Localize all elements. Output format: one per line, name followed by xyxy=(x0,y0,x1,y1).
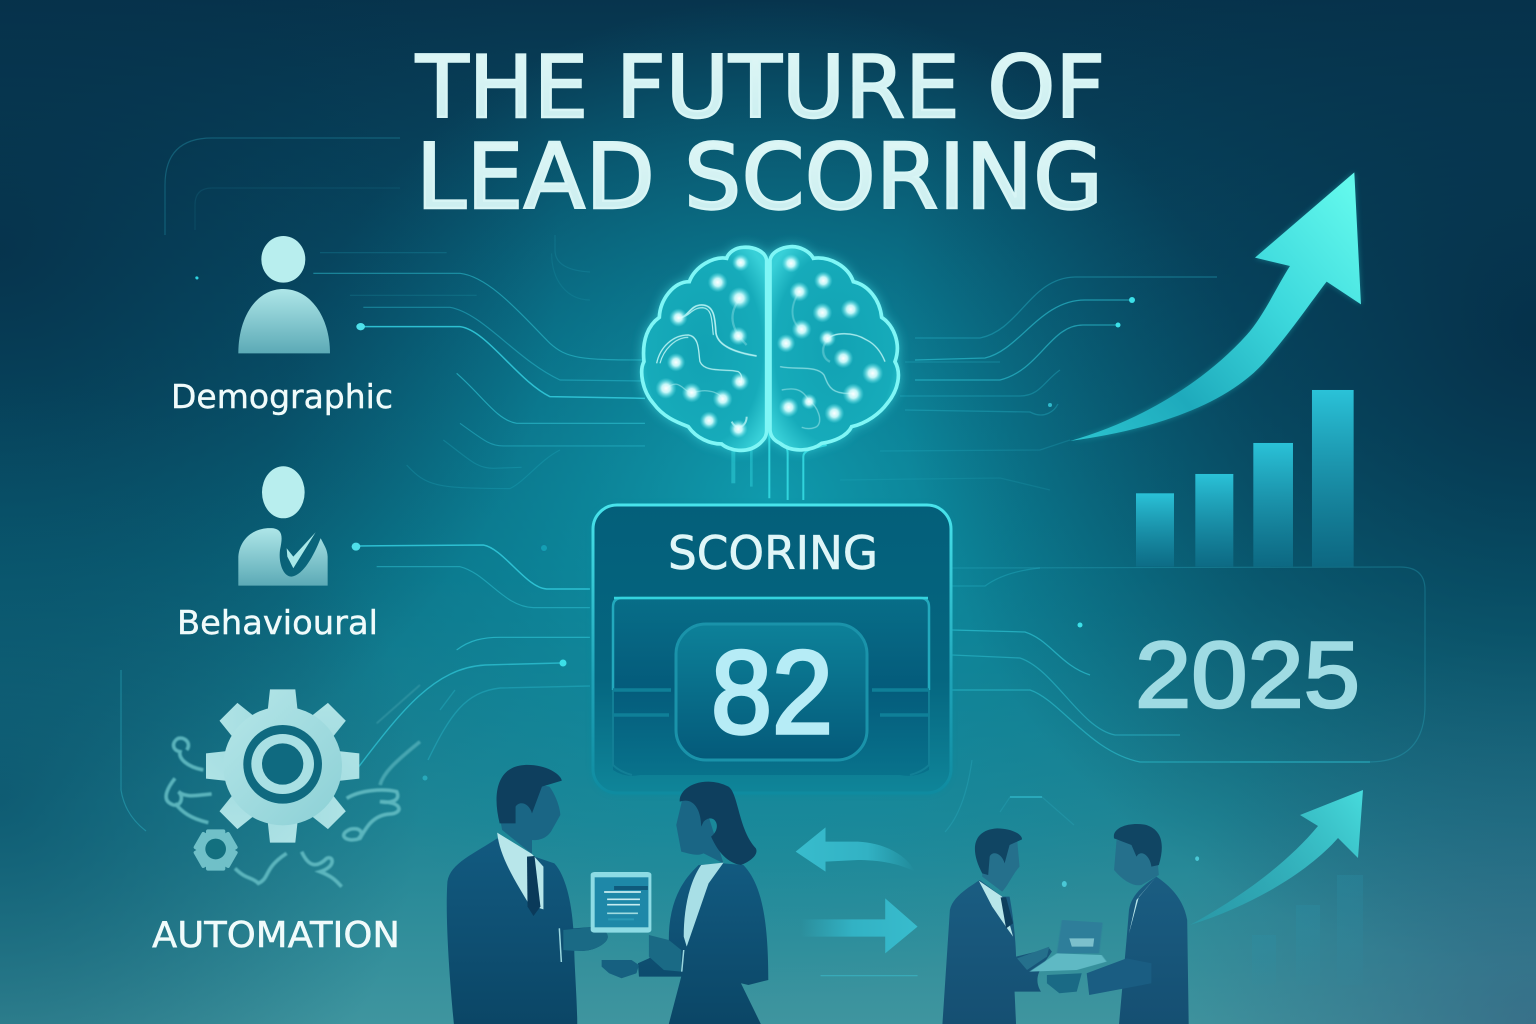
decorative frame lines xyxy=(121,138,1425,832)
lower chart with arrow xyxy=(1190,790,1363,985)
label: AUTOMATION: AUTOMATION xyxy=(152,915,400,956)
tablet xyxy=(591,872,651,933)
label: Demographic: Demographic xyxy=(171,377,393,416)
smoke squiggles xyxy=(166,685,420,887)
small gear xyxy=(193,829,238,871)
right hemisphere xyxy=(770,247,898,450)
title: THE FUTURE OF xyxy=(415,38,1105,138)
score display xyxy=(676,624,867,760)
connection lines: right side xyxy=(541,277,1370,762)
icon: brain xyxy=(642,247,898,500)
right man xyxy=(1087,824,1189,1024)
connection lines: left side xyxy=(195,253,645,650)
people: first pair with tablet xyxy=(447,765,768,1024)
inner frame xyxy=(613,598,929,776)
people: second pair with laptop xyxy=(942,824,1189,1024)
scoring heading: SCORING xyxy=(668,526,878,580)
title xyxy=(415,38,1105,230)
left man xyxy=(942,828,1052,1024)
exchange arrows xyxy=(796,827,1199,976)
gear teeth xyxy=(206,689,359,843)
icon: demographic person xyxy=(238,236,330,353)
brain light spots xyxy=(655,254,883,438)
brain fold lines xyxy=(657,292,885,429)
icon: automation gears xyxy=(166,685,420,887)
icon: behavioural person with check xyxy=(238,466,328,586)
connection lines: lower left xyxy=(196,276,590,780)
year label: 2025 xyxy=(1135,622,1360,727)
man with tablet xyxy=(447,765,608,1024)
bar chart xyxy=(1136,390,1354,567)
brain glow xyxy=(642,247,898,450)
scoring panel xyxy=(592,505,951,794)
laptop and hands xyxy=(1017,920,1107,993)
left hemisphere xyxy=(642,247,767,450)
label: Behavioural: Behavioural xyxy=(177,603,378,642)
score value: 82 xyxy=(711,627,833,759)
large growth arrow xyxy=(1070,172,1361,441)
title: LEAD SCORING xyxy=(416,125,1103,230)
brain stems xyxy=(733,433,827,500)
woman xyxy=(602,782,768,1024)
